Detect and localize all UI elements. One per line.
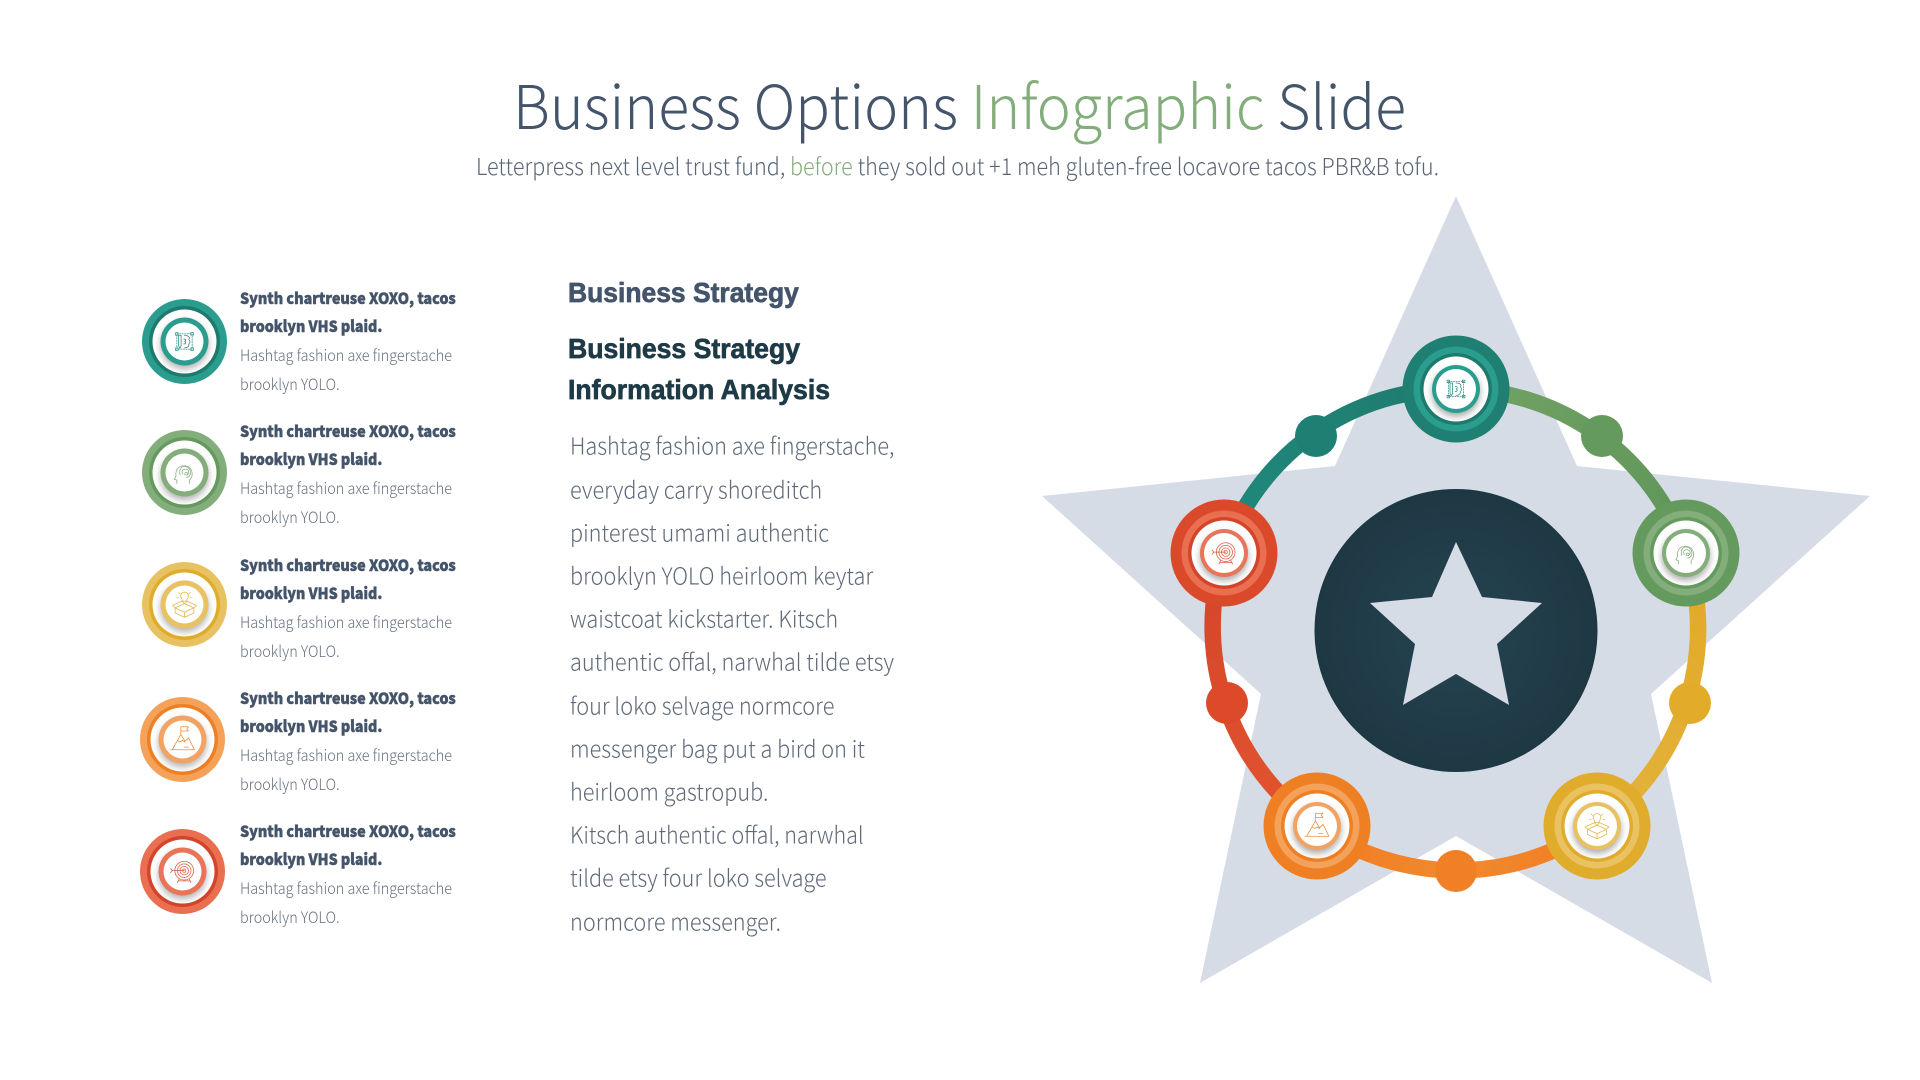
option 5 text <box>240 820 456 928</box>
node: yellow box <box>1544 772 1650 880</box>
center star icon <box>1370 542 1542 705</box>
ring segment: yellow <box>1597 553 1698 826</box>
connector dot: green <box>1581 415 1623 457</box>
option 4 text: brooklyn VHS plaid. <box>240 715 382 737</box>
ring segment: red <box>1213 553 1317 826</box>
body paragraph <box>570 428 894 938</box>
option 2 text <box>240 420 456 528</box>
option 1 text: brooklyn YOLO. <box>240 373 340 395</box>
option 3 text: Hashtag fashion axe fingerstache <box>240 611 452 633</box>
option 3 text: Synth chartreuse XOXO, tacos <box>240 554 456 576</box>
subtitle: Letterpress next level trust fund, before they sold out +1 meh gluten-free locavore tacos PBR&B tofu. <box>476 148 1439 182</box>
icon: red target badge <box>140 829 225 914</box>
option 5: red <box>140 820 456 928</box>
ring segment: teal <box>1224 389 1456 553</box>
node: teal plan <box>1402 336 1510 442</box>
body paragraph: messenger bag put a bird on it <box>570 731 865 765</box>
connector dot: yellow <box>1669 682 1711 724</box>
center dark circle <box>1314 489 1598 772</box>
ring segment: green <box>1456 389 1686 553</box>
heading: information analysis: Business Strategy <box>568 332 801 364</box>
option 2 text: brooklyn YOLO. <box>240 506 340 528</box>
option 4 text: Synth chartreuse XOXO, tacos <box>240 687 456 709</box>
option 4: orange <box>140 687 456 795</box>
option 5 text: Hashtag fashion axe fingerstache <box>240 877 452 899</box>
icon: teal plan badge <box>142 299 227 384</box>
body paragraph: normcore messenger. <box>570 904 781 938</box>
title: Business Options Infographic Slide <box>513 60 1406 147</box>
node: green head <box>1632 500 1740 606</box>
body paragraph: brooklyn YOLO heirloom keytar <box>570 558 874 592</box>
ring segment: orange <box>1317 826 1597 870</box>
body paragraph: everyday carry shoreditch <box>570 472 822 506</box>
option 5 text: brooklyn VHS plaid. <box>240 848 382 870</box>
large background star <box>1042 196 1870 983</box>
option 2 text: Hashtag fashion axe fingerstache <box>240 477 452 499</box>
icon: orange mountain badge <box>140 697 225 782</box>
option 4 text: brooklyn YOLO. <box>240 773 340 795</box>
body paragraph: waistcoat kickstarter. Kitsch <box>570 601 838 635</box>
connector dot: red <box>1206 682 1248 724</box>
option 3 text <box>240 554 456 662</box>
body paragraph: Kitsch authentic offal, narwhal <box>570 817 864 851</box>
option 3 text: brooklyn YOLO. <box>240 640 340 662</box>
body paragraph: pinterest umami authentic <box>570 515 829 549</box>
option 3: yellow <box>142 554 456 662</box>
option 2 text: Synth chartreuse XOXO, tacos <box>240 420 456 442</box>
heading: information analysis: Information Analysis <box>568 373 830 405</box>
connector dot: teal <box>1295 415 1337 457</box>
body paragraph: authentic offal, narwhal tilde etsy <box>570 644 894 678</box>
option 1: teal <box>142 287 456 395</box>
option 2 text: brooklyn VHS plaid. <box>240 448 382 470</box>
node: orange mountain <box>1264 772 1370 880</box>
option 1 text: brooklyn VHS plaid. <box>240 315 382 337</box>
option 1 text: Hashtag fashion axe fingerstache <box>240 344 452 366</box>
icon: yellow box badge <box>142 562 227 647</box>
option 5 text: Synth chartreuse XOXO, tacos <box>240 820 456 842</box>
option 1 text <box>240 287 456 395</box>
panel: middle text column <box>568 276 894 938</box>
option 4 text <box>240 687 456 795</box>
option 2: green <box>142 420 456 528</box>
body paragraph: Hashtag fashion axe fingerstache, <box>570 428 894 462</box>
option 5 text: brooklyn YOLO. <box>240 906 340 928</box>
body paragraph: four loko selvage normcore <box>570 688 834 722</box>
connector dot: orange <box>1435 850 1477 892</box>
body paragraph: tilde etsy four loko selvage <box>570 860 827 894</box>
diagram: star with option ring <box>1042 196 1870 983</box>
option 1 text: Synth chartreuse XOXO, tacos <box>240 287 456 309</box>
option 4 text: Hashtag fashion axe fingerstache <box>240 744 452 766</box>
panel: left option list <box>140 287 456 928</box>
body paragraph: heirloom gastropub. <box>570 774 768 808</box>
heading: business strategy: Business Strategy <box>568 276 799 308</box>
heading: information analysis <box>568 332 830 405</box>
option 3 text: brooklyn VHS plaid. <box>240 582 382 604</box>
icon: green head badge <box>142 430 227 515</box>
node: red target <box>1170 500 1278 606</box>
